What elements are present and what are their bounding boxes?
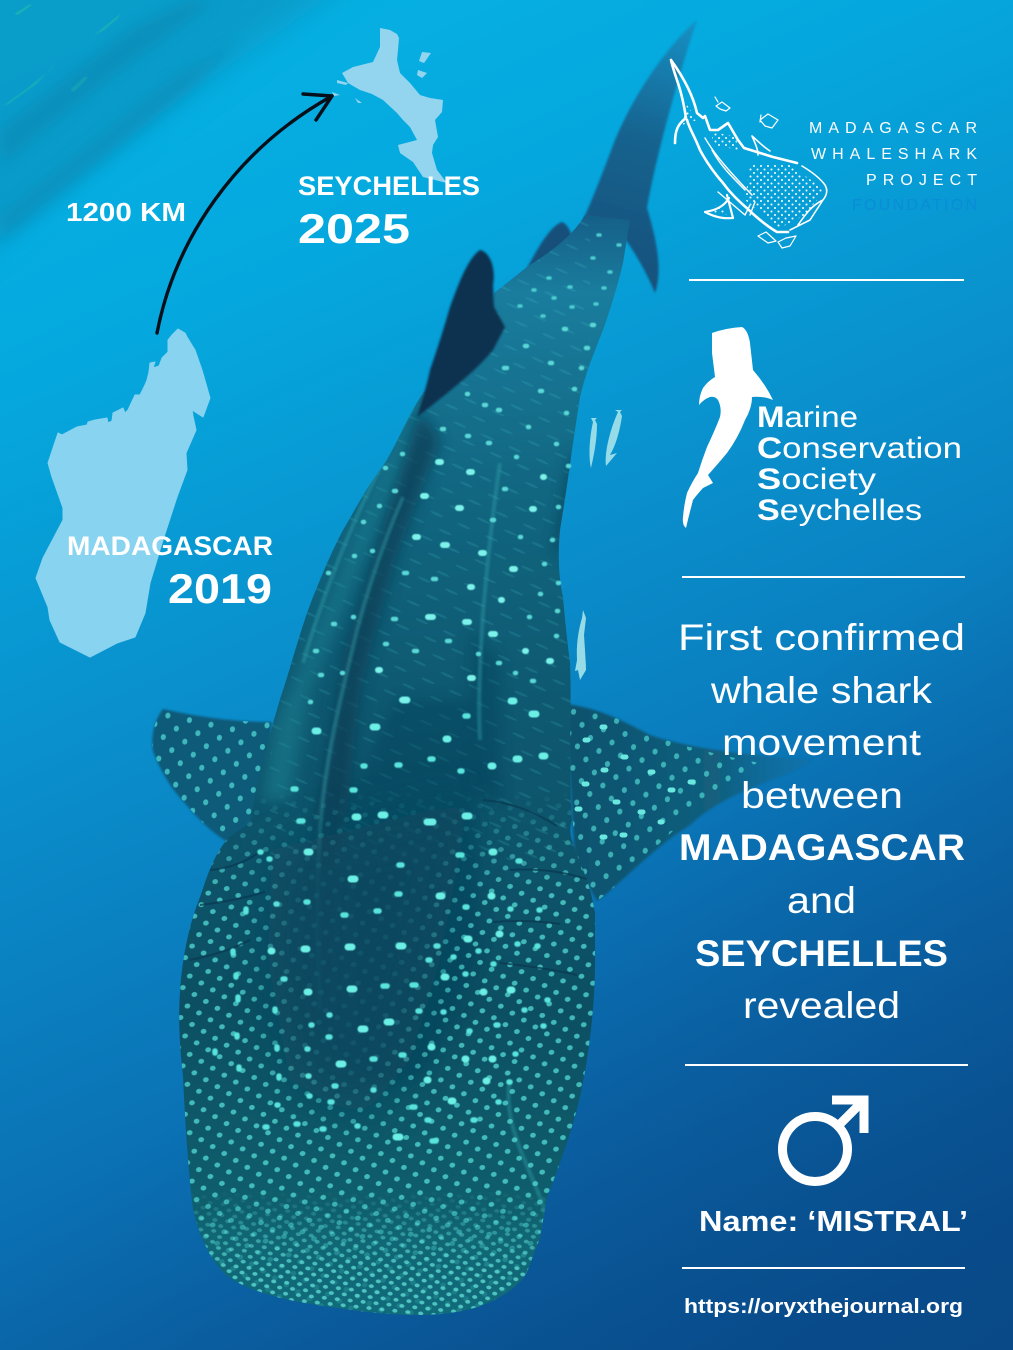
label: Madagascar 2019: 2019 — [168, 565, 272, 612]
label: Madagascar 2019 — [67, 531, 273, 612]
body markings — [170, 220, 610, 1330]
icon: male symbol — [782, 1100, 864, 1182]
headline text: First confirmed — [678, 616, 965, 658]
icon: migration arrow — [157, 94, 332, 333]
logo: Marine Conservation Society Seychelles — [683, 327, 962, 528]
logo wordmark — [809, 120, 977, 214]
label: Seychelles 2025 — [298, 171, 480, 252]
lighter left flank — [262, 456, 397, 802]
source URL: https://oryxthejournal.org — [684, 1296, 963, 1318]
headline text: whale shark — [710, 669, 932, 711]
headline text: movement — [722, 721, 922, 763]
bright spots on shark back — [215, 235, 620, 1141]
icon: line-art whale shark — [671, 60, 827, 248]
headline text: revealed — [743, 984, 900, 1026]
dark centre of back — [268, 800, 470, 1120]
snout fine spot pattern — [194, 1197, 546, 1315]
map: Madagascar — [36, 329, 210, 657]
logo: Madagascar Whaleshark Project — [671, 60, 977, 248]
first dorsal fin — [417, 250, 505, 417]
divider — [682, 576, 965, 578]
back stripe texture — [270, 220, 590, 860]
gill slits — [190, 800, 590, 975]
right pectoral fin — [553, 704, 815, 901]
logo wordmark: PROJECT — [866, 172, 977, 189]
logo wordmark — [757, 401, 962, 527]
divider — [682, 1267, 965, 1269]
remora fish — [575, 410, 622, 680]
headline text: MADAGASCAR — [679, 826, 965, 868]
logo wordmark: Conservation — [757, 432, 962, 465]
divider — [689, 279, 964, 281]
light ridges — [303, 407, 550, 1230]
label: Seychelles 2025: SEYCHELLES — [298, 171, 480, 201]
label: distance: 1200 KM — [66, 197, 186, 227]
headline text: SEYCHELLES — [695, 932, 948, 974]
logo wordmark: MADAGASCAR — [809, 120, 977, 137]
logo wordmark: FOUNDATION — [852, 197, 977, 214]
left pectoral fin — [152, 709, 272, 842]
second dorsal fin — [527, 222, 578, 268]
headline text — [678, 616, 965, 1026]
map: Seychelles — [332, 28, 447, 183]
label: Madagascar 2019: MADAGASCAR — [67, 531, 273, 561]
logo wordmark: Society — [757, 463, 876, 496]
shark name: Name: ‘MISTRAL’ — [699, 1206, 968, 1238]
flank spot pattern — [179, 798, 595, 1315]
headline text: between — [741, 774, 903, 816]
label: Seychelles 2025: 2025 — [298, 205, 410, 252]
whale shark photograph recreation — [152, 20, 815, 1330]
logo wordmark: Seychelles — [757, 494, 922, 527]
divider — [685, 1064, 968, 1066]
headline text: and — [787, 879, 856, 921]
icon: whale shark silhouette — [683, 327, 773, 528]
dark bands along the back — [312, 412, 571, 858]
logo wordmark: Marine — [757, 401, 858, 434]
shark tail — [583, 20, 697, 293]
logo wordmark: WHALESHARK — [811, 146, 977, 163]
shark body — [179, 215, 630, 1315]
